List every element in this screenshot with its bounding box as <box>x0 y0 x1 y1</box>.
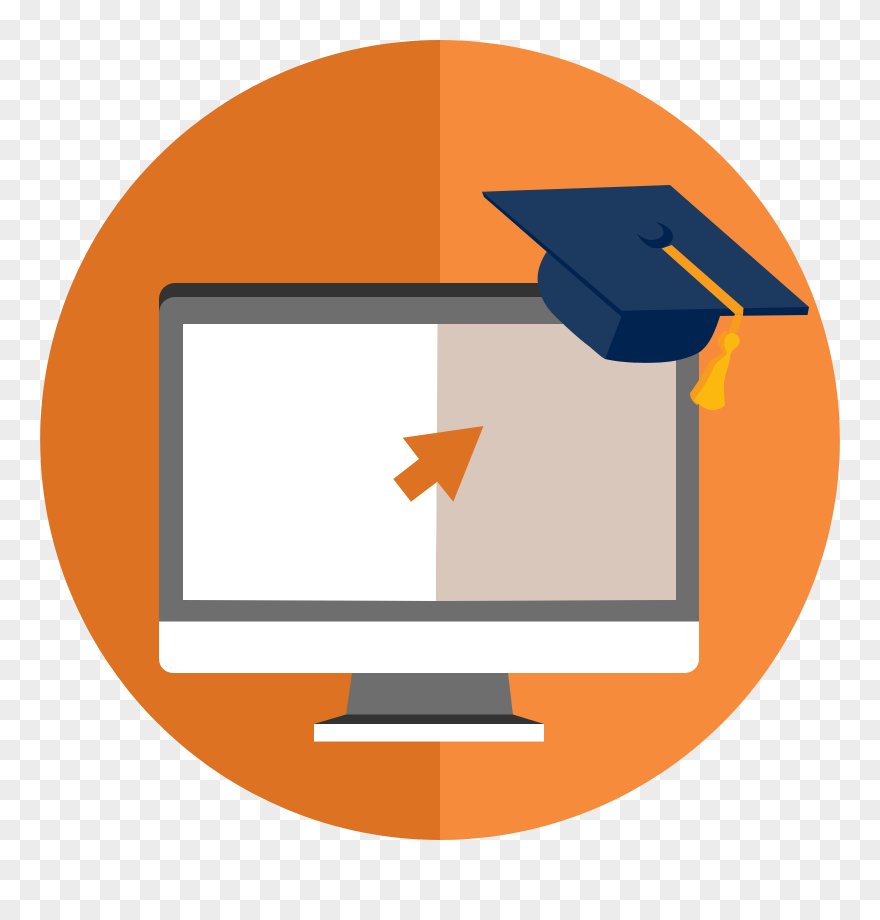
monitor chin <box>159 622 699 673</box>
orange circle background <box>40 40 840 840</box>
tassel <box>662 245 744 410</box>
cap board <box>482 185 809 317</box>
cap button <box>637 222 673 248</box>
monitor stand <box>314 673 544 742</box>
icon: graduation cap <box>482 185 809 410</box>
icon: cursor arrow <box>393 426 484 502</box>
desktop monitor <box>159 283 699 742</box>
monitor screen <box>183 324 676 601</box>
cap base <box>538 252 720 363</box>
